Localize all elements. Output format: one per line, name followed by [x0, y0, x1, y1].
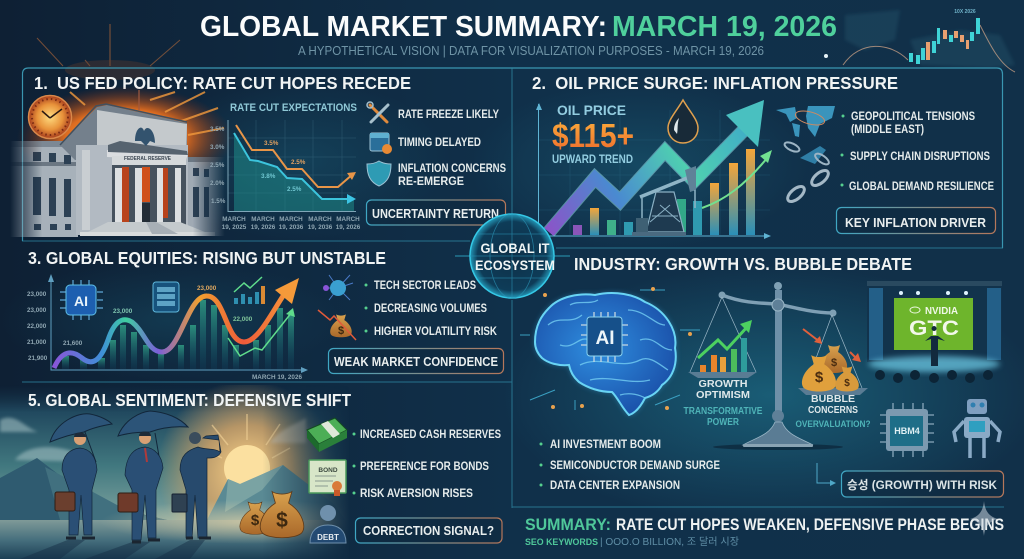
icon: debt person: [310, 505, 346, 543]
illustration: balance scale: [688, 282, 868, 450]
illustration: NVIDIA GTC stage: GTC: [909, 317, 959, 340]
chart: rate cut expectations: 19, 2036: [308, 224, 333, 231]
bullet list: [840, 111, 994, 193]
chart: rate cut expectations: 19, 2036: [279, 224, 304, 231]
scale labels: OPTIMISM: [696, 389, 750, 401]
heading 1: 1. US FED POLICY: RATE CUT HOPES RECEDE: [34, 73, 411, 93]
illustration: AI brain: AI: [596, 328, 614, 349]
chart: rate cut expectations: 1.5%: [211, 198, 226, 205]
bullet list: (MIDDLE EAST): [851, 124, 924, 136]
chart: rate cut expectations: MARCH: [251, 216, 275, 223]
chart: equities wave: MARCH 19, 2026: [252, 374, 302, 381]
callout: uncertainty return: [366, 200, 506, 225]
bullet list: [540, 439, 720, 492]
illustration: NVIDIA GTC stage: [867, 281, 1002, 383]
bubble concerns money bags: [802, 329, 861, 392]
chart: rate cut expectations: 2.5%: [210, 162, 225, 169]
callout: weak market confidence: WEAK MARKET CONFIDENCE: [334, 355, 498, 369]
oil price figure: $115+: [552, 117, 634, 154]
chart: equities wave: 23,000: [197, 285, 217, 292]
scene: sunrise landscape: [0, 385, 345, 559]
bullet list: DATA CENTER EXPANSION: [550, 480, 680, 492]
illustration: NVIDIA GTC stage: NVIDIA: [925, 306, 958, 317]
icon: world map: [776, 106, 835, 137]
eagle: [135, 128, 155, 146]
chart: rate cut expectations: 3.5%: [264, 140, 279, 147]
panel: US Fed policy: [10, 73, 506, 237]
callout: growth with risk: 승성 (GROWTH) WITH RISK: [847, 478, 997, 492]
icon: money bags: $: [251, 512, 260, 529]
chart: rate cut expectations: 2.0%: [210, 180, 225, 187]
growth optimism chart icon: [698, 320, 752, 372]
bullet text: [398, 109, 506, 188]
bullet text: RATE FREEZE LIKELY: [398, 109, 499, 121]
bullet list: SUPPLY CHAIN DISRUPTIONS: [850, 151, 990, 163]
chart: equities wave: 22,000: [27, 323, 47, 330]
scale labels: GROWTH: [698, 378, 748, 390]
chart: rate cut expectations: 19, 2026: [251, 224, 276, 231]
illustration: AI brain: [520, 287, 700, 415]
clock: [28, 96, 72, 138]
globe badge: global IT ecosystem: ECOSYSTEM: [475, 257, 555, 273]
bullet list: HIGHER VOLATILITY RISK: [374, 326, 498, 338]
heading 3: 3. GLOBAL EQUITIES: RISING BUT UNSTABLE: [28, 248, 386, 268]
chart: rate cut expectations: 19, 2025: [222, 224, 247, 231]
top-right decoration: world map and candlesticks: [824, 9, 1015, 72]
bubble concerns money bags: $: [844, 378, 850, 389]
globe badge: global IT ecosystem: [455, 214, 570, 298]
heading 4: INDUSTRY: GROWTH VS. BUBBLE DEBATE: [574, 254, 912, 274]
chart: rate cut expectations: RATE CUT EXPECTATIONS: [230, 102, 357, 114]
arrow to callout: [817, 463, 836, 486]
icon: falling money bag: [318, 310, 356, 340]
panel: industry growth vs bubble: [520, 254, 1004, 497]
icon: calendar: [370, 133, 392, 154]
oil price figure: [552, 102, 634, 166]
icon: broken chain: [785, 168, 831, 204]
summary: SEO KEYWORDS: [525, 537, 598, 548]
icon: tools: [367, 102, 388, 122]
oil price figure: UPWARD TREND: [552, 154, 633, 166]
bullet list: PREFERENCE FOR BONDS: [360, 461, 489, 473]
oil price figure: OIL PRICE: [557, 102, 626, 118]
callout: uncertainty return: UNCERTAINTY RETURN: [372, 207, 499, 221]
title: MARCH 19, 2026: [612, 11, 837, 43]
watermark star: [970, 501, 998, 536]
callout: weak market confidence: [328, 348, 504, 374]
icon: shield: [367, 161, 391, 186]
bullet list: AI INVESTMENT BOOM: [550, 439, 661, 451]
illustration: pumpjack: [632, 166, 696, 236]
panel frame: top row: [22, 68, 1002, 248]
chart: equities wave: 21,900: [28, 355, 48, 362]
chart: rate cut expectations: 2.5%: [291, 159, 306, 166]
bullet text: TIMING DELAYED: [398, 137, 481, 149]
icon: cash stack: [307, 418, 347, 452]
bullet list: GEOPOLITICAL TENSIONS: [851, 111, 975, 123]
chart: equities wave: 21,000: [27, 339, 47, 346]
chart: equities wave: 23,000: [27, 291, 47, 298]
chart: equities wave: 23,000: [27, 307, 47, 314]
bubble concerns money bags: $: [831, 357, 837, 369]
icon: robot: [954, 399, 1000, 458]
chart: rate cut expectations: MARCH: [336, 216, 360, 223]
icon: HBM4 chip: HBM4: [894, 426, 920, 436]
title: GLOBAL MARKET SUMMARY:: [200, 11, 607, 43]
icon: AI chip: AI: [74, 293, 88, 309]
callout: key inflation driver: KEY INFLATION DRIVER: [845, 216, 986, 230]
icon: chain: [783, 140, 831, 166]
bullet list: [364, 280, 498, 338]
scale labels: BUBBLE: [811, 393, 855, 405]
chart: rate cut expectations: 19, 2026: [336, 224, 361, 231]
bullet list: INCREASED CASH RESERVES: [360, 429, 501, 441]
figure: investor shading eyes: [172, 432, 221, 538]
figure: investor with umbrella 2: [118, 411, 188, 542]
bullet list: [352, 429, 501, 500]
heading 2: 2. OIL PRICE SURGE: INFLATION PRESSURE: [532, 73, 898, 93]
panel: global sentiment: [0, 380, 502, 559]
icon: bond certificate: [309, 460, 346, 496]
subtitle: A HYPOTHETICAL VISION | DATA FOR VISUALIZATION PURPOSES - MARCH 19, 2026: [298, 44, 764, 58]
scale labels: POWER: [707, 417, 739, 428]
icon: mini growth chart: [234, 277, 265, 304]
chart: rate cut expectations: MARCH: [279, 216, 303, 223]
Fed sunburst rays above panel: [37, 24, 180, 80]
bullet list: TECH SECTOR LEADS: [374, 280, 476, 292]
chart: oil price trend: [536, 100, 772, 239]
chart: rate cut expectations: 2.5%: [287, 186, 302, 193]
icon: oil drop: [668, 100, 698, 143]
globe badge: global IT ecosystem: GLOBAL IT: [480, 240, 550, 256]
bullet list: GLOBAL DEMAND RESILIENCE: [849, 181, 994, 193]
chart: rate cut expectations: 3.5%: [210, 126, 225, 133]
bullet list: SEMICONDUCTOR DEMAND SURGE: [550, 460, 720, 472]
icon: debt person: DEBT: [317, 533, 339, 542]
summary: [525, 515, 1004, 548]
icon: money bags: $: [276, 509, 288, 532]
top-right decoration: world map and candlesticks: 10X 2026: [954, 9, 976, 15]
scale labels: TRANSFORMATIVE: [684, 406, 763, 417]
icon: AI chip: [60, 280, 103, 320]
chart: rate cut expectations: 3.8%: [261, 173, 276, 180]
scale labels: [684, 378, 870, 429]
icon: falling money bag: $: [338, 325, 344, 337]
panel: global equities: [27, 248, 504, 381]
chart: rate cut expectations: MARCH: [308, 216, 332, 223]
chart: rate cut expectations: [210, 102, 361, 231]
chart: rate cut expectations: MARCH: [222, 216, 246, 223]
chart: equities wave: 23,000: [113, 308, 133, 315]
icon: money bags: [240, 492, 304, 538]
illustration: Federal Reserve building with sunburst and clock: [10, 86, 233, 237]
icon: server chip: [153, 282, 179, 312]
bubble concerns money bags: $: [815, 369, 824, 386]
callout: correction signal: [356, 518, 502, 543]
title: [200, 11, 837, 43]
callout: correction signal: CORRECTION SIGNAL?: [363, 524, 494, 538]
panel dividers: [22, 68, 1004, 508]
bullet text: RE-EMERGE: [398, 176, 464, 188]
illustration: Federal Reserve building with sunburst and clock: FEDERAL RESERVE: [124, 156, 172, 162]
scale labels: OVERVALUATION?: [796, 419, 870, 429]
chart: equities wave: 21,600: [63, 340, 83, 347]
figure: investor with umbrella 1: [50, 414, 112, 538]
callout: growth with risk: [842, 471, 1004, 497]
bullet list: RISK AVERSION RISES: [360, 488, 473, 500]
callout: key inflation driver: [836, 208, 996, 234]
summary: SUMMARY:: [525, 515, 611, 534]
bullet list: DECREASING VOLUMES: [374, 303, 487, 315]
icon: network virus: [323, 275, 353, 300]
summary: | OOO.O BILLION, 조 달러 시장: [600, 536, 739, 548]
scale labels: CONCERNS: [808, 404, 858, 416]
icon: bond certificate: BOND: [318, 467, 338, 474]
bullet text: INFLATION CONCERNS: [398, 163, 506, 175]
chart: equities wave: [27, 274, 308, 381]
heading 5: 5. GLOBAL SENTIMENT: DEFENSIVE SHIFT: [28, 390, 351, 410]
panel: oil price surge: [532, 73, 996, 239]
icon: HBM4 chip: [880, 403, 934, 457]
chart: rate cut expectations: 3.0%: [210, 144, 225, 151]
chart: equities wave: 22,000: [233, 316, 253, 323]
